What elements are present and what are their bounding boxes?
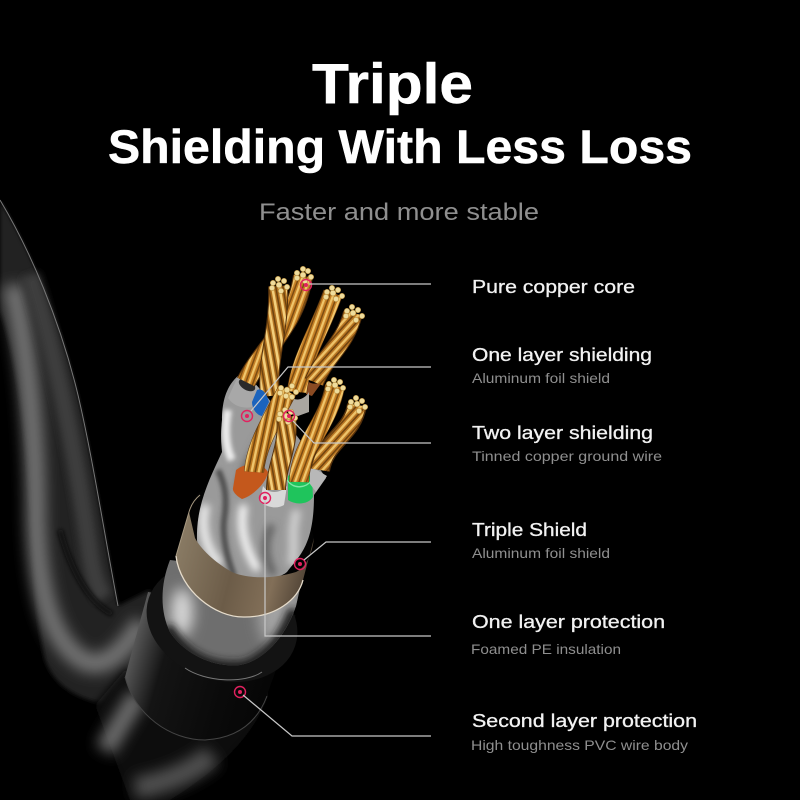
main cable body	[95, 670, 270, 800]
title: Shielding With Less Loss	[108, 120, 692, 173]
cable illustration	[0, 200, 368, 800]
middle strands	[297, 293, 353, 392]
callout: one layer shielding: Aluminum foil shield	[472, 370, 610, 386]
callout: triple shield	[294, 519, 610, 570]
callout: one layer shielding	[242, 344, 652, 422]
callout: pure copper core	[300, 276, 635, 297]
front strands	[233, 386, 357, 507]
curved cable tail	[0, 200, 190, 730]
callout: one layer protection: Foamed PE insulation	[471, 641, 621, 657]
jacket rim	[125, 677, 267, 740]
silver cylinder	[162, 560, 300, 666]
green sheath	[288, 472, 313, 503]
callout: pure copper core: Pure copper core	[472, 276, 635, 297]
title	[108, 52, 692, 173]
subtitle: Faster and more stable	[259, 199, 539, 226]
orange sheath	[233, 464, 268, 499]
tan shield band	[176, 495, 314, 617]
callout: second layer protection: High toughness PVC wire body	[471, 737, 688, 753]
copper strand ends, back	[269, 266, 314, 294]
black disc	[131, 543, 313, 701]
white sheath	[260, 486, 287, 507]
callout: second layer protection	[234, 686, 697, 753]
callout: one layer shielding: One layer shielding	[472, 344, 652, 365]
callout: second layer protection: Second layer protection	[472, 710, 697, 731]
callout: one layer protection	[260, 492, 665, 657]
light gray sheath	[310, 466, 327, 492]
blue and brown sheaths	[252, 378, 325, 416]
copper strand ends, front	[276, 377, 368, 425]
foil wrapped pairs	[196, 376, 326, 578]
outer jacket sleeve	[125, 592, 296, 740]
rear gray sheath	[288, 392, 309, 416]
callout: two layer shielding: Tinned copper ground wire	[472, 448, 662, 464]
callout: triple shield: Triple Shield	[472, 519, 587, 540]
callout: two layer shielding: Two layer shielding	[472, 422, 653, 443]
copper strand ends, middle	[323, 285, 365, 323]
callout: triple shield: Aluminum foil shield	[472, 545, 610, 561]
back strand pair	[246, 276, 303, 396]
callout: one layer protection: One layer protection	[472, 611, 665, 632]
callout: two layer shielding	[284, 410, 662, 464]
title: Triple	[312, 52, 473, 116]
interior shadow	[178, 485, 314, 608]
